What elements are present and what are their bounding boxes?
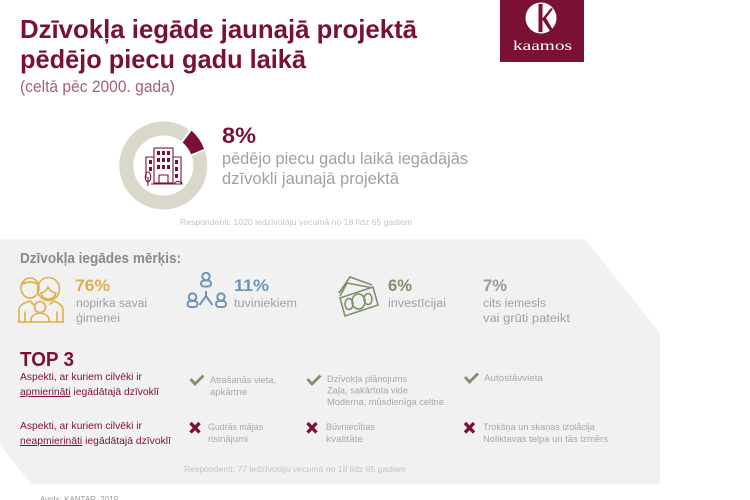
logo: Kaamos [500,0,584,62]
stat: 76% family: nopirka savai [76,298,147,310]
stat: 6% investment: 6% [388,276,412,295]
stat description [222,149,468,188]
stat: 11% relatives: 11% [234,276,269,295]
label: satisfied aspects [20,372,159,398]
logo: Kaamos: kaamos [513,39,572,54]
stat: 6% investment [388,276,446,310]
satisfied aspect 2: Moderna, mūsdienīga celtne [327,397,444,408]
stat: 11% relatives [234,276,297,310]
icon: check 2 [308,376,320,384]
satisfied aspect 1: Atrašanās vieta, [210,375,276,386]
stat: 76% family: ģimenei [76,312,120,325]
icon: check 1 [190,376,204,384]
big stat: 8%: 8% [222,123,256,148]
title [20,14,418,74]
satisfied aspect 2: Zaļa, sakārtota vide [327,386,408,396]
dissatisfied aspect 2: kvalitāte [326,434,363,445]
satisfied aspect 1: apkārtne [210,387,247,398]
icon: cross 2 [308,423,316,432]
dissatisfied aspect 2 [326,422,375,445]
satisfied aspect 3: Autostāvvieta [484,373,544,384]
satisfied aspect 2 [327,374,444,408]
label: dissatisfied aspects [20,421,171,447]
panel: purpose and top 3 background [0,239,660,484]
icon: family [18,278,64,322]
stat: 7% other: vai grūti pateikt [483,313,571,325]
icon: banknotes [339,277,378,316]
satisfied aspect 1 [210,375,276,398]
stat description: dzīvokli jaunajā projektā [222,169,400,188]
icon: cross 3 [465,423,474,432]
dissatisfied aspect 3: Trokšņa un skaņas izolācija [483,422,596,433]
stat: 6% investment: investīcijai [388,298,446,310]
stat: 76% family: 76% [75,276,110,295]
icon: relatives [188,273,226,307]
label: dissatisfied aspects: Aspekti, ar kuriem cilvēki ir [20,421,143,432]
icon: cross 1 [190,423,200,432]
dissatisfied aspect 2: Būvniecības [326,422,375,433]
dissatisfied aspect 3 [483,422,608,445]
donut chart: 8% [126,128,206,202]
label: satisfied aspects: apmierināti iegādātajā dzīvoklī [20,387,159,398]
dissatisfied aspect 1: risinājumi [208,434,248,445]
dissatisfied aspect 1: Gudrās mājas [208,422,263,433]
dissatisfied aspect 1 [208,422,263,445]
title: Dzīvokļa iegāde jaunajā projektā [20,14,418,44]
dissatisfied aspect 3: Noliktavas telpa un tās izmērs [483,434,608,445]
respondents note 1: Respondenti: 1020 iedzīvotāju vecumā no 18 līdz 65 gadiem [180,217,412,227]
heading: purpose: Dzīvokļa iegādes mērķis: [20,250,181,267]
stat: 76% family [75,276,147,325]
heading: TOP 3: TOP 3 [20,349,74,371]
stat: 7% other: cits iemesls [483,298,546,310]
stat description: pēdējo piecu gadu laikā iegādājās [222,149,468,168]
label: satisfied aspects: Aspekti, ar kuriem cilvēki ir [20,372,143,383]
respondents note 2: Respondenti: 77 iedzīvotāju vecumā no 18 līdz 65 gadiem [184,464,406,474]
subtitle: (celtā pēc 2000. gada) [20,77,175,96]
satisfied aspect 2: Dzīvokļa plānojums [327,374,407,385]
title: pēdējo piecu gadu laikā [20,44,307,74]
stat: 11% relatives: tuviniekiem [234,298,297,310]
icon: apartment buildings [145,148,182,186]
stat: 7% other: 7% [483,276,507,295]
label: dissatisfied aspects: neapmierināti iegādātajā dzīvoklī [20,436,171,447]
stat: 7% other [483,276,571,325]
icon: check 3 [465,374,478,382]
